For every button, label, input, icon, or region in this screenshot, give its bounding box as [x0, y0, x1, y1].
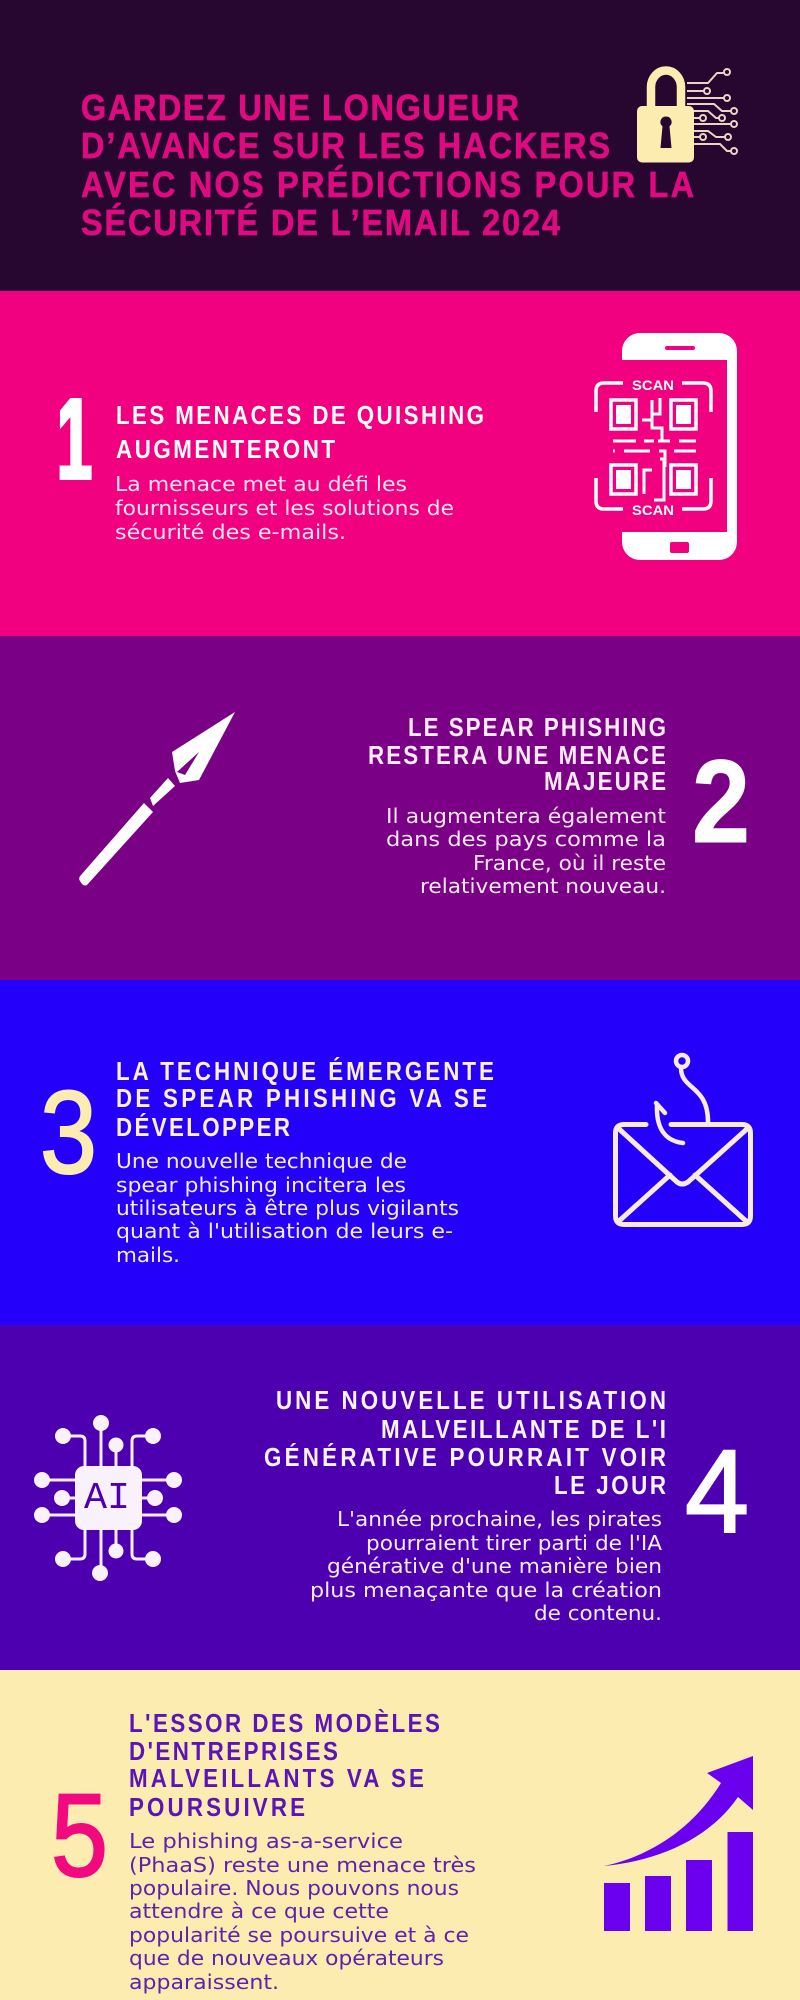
heading: DÉVELOPPER — [116, 1112, 290, 1142]
body text: (PhaaS) reste une menace très — [129, 1853, 476, 1877]
icon: phone with QR code — [596, 333, 737, 560]
body text: sécurité des e-mails. — [115, 520, 346, 544]
title: AVEC NOS PRÉDICTIONS POUR LA — [81, 163, 694, 205]
body text: générative d'une manière bien — [327, 1554, 662, 1578]
body text: Une nouvelle technique de — [116, 1149, 407, 1173]
number 3: 3 — [40, 1067, 97, 1199]
body text: pourraient tirer parti de l'IA — [366, 1531, 662, 1555]
heading — [116, 1056, 494, 1142]
heading — [264, 1386, 666, 1500]
heading: LE SPEAR PHISHING — [408, 713, 666, 742]
panel: 2 spear phishing — [0, 636, 800, 980]
title: D’AVANCE SUR LES HACKERS — [81, 126, 610, 166]
icon: phone with QR code: SCAN — [632, 377, 674, 393]
body text: de contenu. — [534, 1601, 662, 1625]
number 4: 4 — [685, 1426, 749, 1558]
heading: UNE NOUVELLE UTILISATION — [276, 1386, 666, 1415]
icon: spear — [79, 712, 235, 886]
icon: phone with QR code: SCAN — [632, 502, 674, 518]
heading: POURSUIVRE — [129, 1793, 305, 1822]
panel: 3 emerging technique — [0, 980, 800, 1325]
icon: rising bar chart with arrow — [604, 1756, 753, 1931]
body text: mails. — [116, 1243, 180, 1267]
body text: popularité se poursuive et à ce — [129, 1923, 469, 1947]
icon: envelope with fishing hook — [616, 1055, 750, 1224]
heading: GÉNÉRATIVE POURRAIT VOIR — [264, 1442, 666, 1472]
heading: L'ESSOR DES MODÈLES — [129, 1708, 440, 1738]
body text: relativement nouveau. — [420, 874, 666, 898]
heading — [368, 713, 666, 796]
heading: DE SPEAR PHISHING VA SE — [116, 1084, 487, 1113]
heading — [116, 401, 484, 464]
body text: Il augmentera également — [386, 804, 666, 828]
body text: apparaissent. — [129, 1970, 279, 1994]
title — [81, 88, 694, 243]
heading: RESTERA UNE MENACE — [368, 741, 666, 770]
heading: MALVEILLANTS VA SE — [129, 1764, 424, 1793]
heading: AUGMENTERONT — [116, 435, 335, 464]
body text: plus menaçante que la création — [310, 1578, 662, 1602]
heading: MALVEILLANTE DE L'I — [381, 1415, 666, 1444]
body text: spear phishing incitera les — [116, 1173, 406, 1197]
heading: LES MENACES DE QUISHING — [116, 401, 484, 430]
panel: 4 generative AI — [0, 1325, 800, 1670]
body text: que de nouveaux opérateurs — [129, 1946, 444, 1970]
heading: D'ENTREPRISES — [129, 1737, 338, 1766]
body text: quant à l'utilisation de leurs e- — [116, 1219, 453, 1243]
panel: 1 quishing — [0, 291, 800, 636]
body text — [129, 1829, 476, 1994]
title: GARDEZ UNE LONGUEUR — [81, 88, 519, 128]
panel: title header — [0, 0, 800, 291]
body text: utilisateurs à être plus vigilants — [116, 1196, 459, 1220]
icon: padlock with circuit lines — [637, 69, 737, 162]
body text: attendre à ce que cette — [129, 1899, 389, 1923]
body text: fournisseurs et les solutions de — [115, 496, 454, 520]
number 5: 5 — [51, 1770, 108, 1902]
icon: AI chip: AI — [84, 1477, 130, 1520]
body text: L'année prochaine, les pirates — [337, 1507, 662, 1531]
body text: populaire. Nous pouvons nous — [129, 1876, 459, 1900]
body text: Le phishing as-a-service — [129, 1829, 403, 1853]
body text: France, où il reste — [473, 851, 666, 875]
panel: 5 malicious business models — [0, 1670, 800, 2000]
body text: La menace met au défi les — [115, 472, 407, 496]
number 2: 2 — [692, 736, 750, 868]
body text — [386, 804, 666, 898]
icon: AI chip — [34, 1415, 182, 1581]
body text — [310, 1507, 662, 1625]
title: SÉCURITÉ DE L’EMAIL 2024 — [81, 201, 560, 243]
number 1: 1 — [57, 374, 92, 506]
heading — [129, 1708, 440, 1822]
body text: dans des pays comme la — [386, 827, 666, 851]
heading: MAJEURE — [544, 767, 666, 796]
body text — [115, 472, 454, 544]
heading: LA TECHNIQUE ÉMERGENTE — [116, 1056, 494, 1086]
body text — [116, 1149, 459, 1267]
heading: LE JOUR — [554, 1471, 666, 1500]
